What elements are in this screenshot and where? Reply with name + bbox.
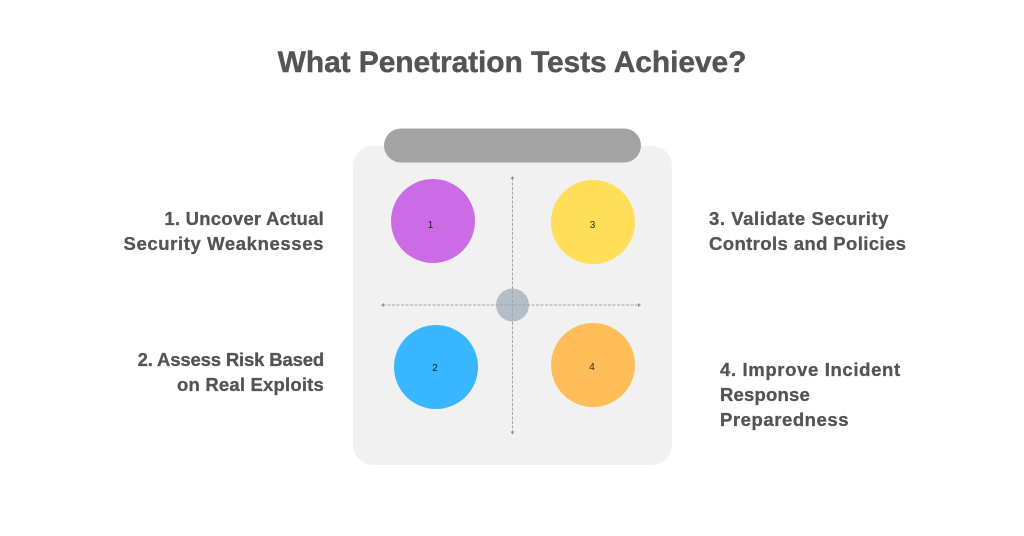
label 4: Response [720, 384, 810, 405]
title: What Penetration Tests Achieve? [278, 46, 746, 79]
circle 4: 4 [589, 362, 595, 373]
clip bar [384, 128, 641, 162]
label 4: Preparedness [720, 409, 849, 430]
label 3 [709, 208, 906, 254]
label 4: 4. Improve Incident [720, 359, 901, 380]
circle 1 [391, 179, 475, 263]
label 3: 3. Validate Security [709, 208, 889, 229]
circle 4 [551, 323, 635, 407]
panel: board background [353, 146, 672, 465]
label 4 [720, 359, 901, 430]
circle 3 [551, 180, 635, 264]
circle 1: 1 [428, 220, 434, 231]
circle 2 [394, 325, 478, 409]
horizontal axis arrow [381, 303, 641, 307]
label 2 [138, 349, 324, 396]
circle 2: 2 [432, 363, 438, 374]
label 1: 1. Uncover Actual [164, 208, 324, 229]
vertical axis arrow [510, 176, 514, 434]
label 1: Security Weaknesses [124, 233, 324, 254]
circle 3: 3 [590, 220, 596, 231]
label 1 [124, 208, 324, 254]
center node [496, 288, 529, 322]
label 2: 2. Assess Risk Based [138, 349, 324, 370]
label 2: on Real Exploits [177, 374, 324, 395]
label 3: Controls and Policies [709, 233, 906, 254]
